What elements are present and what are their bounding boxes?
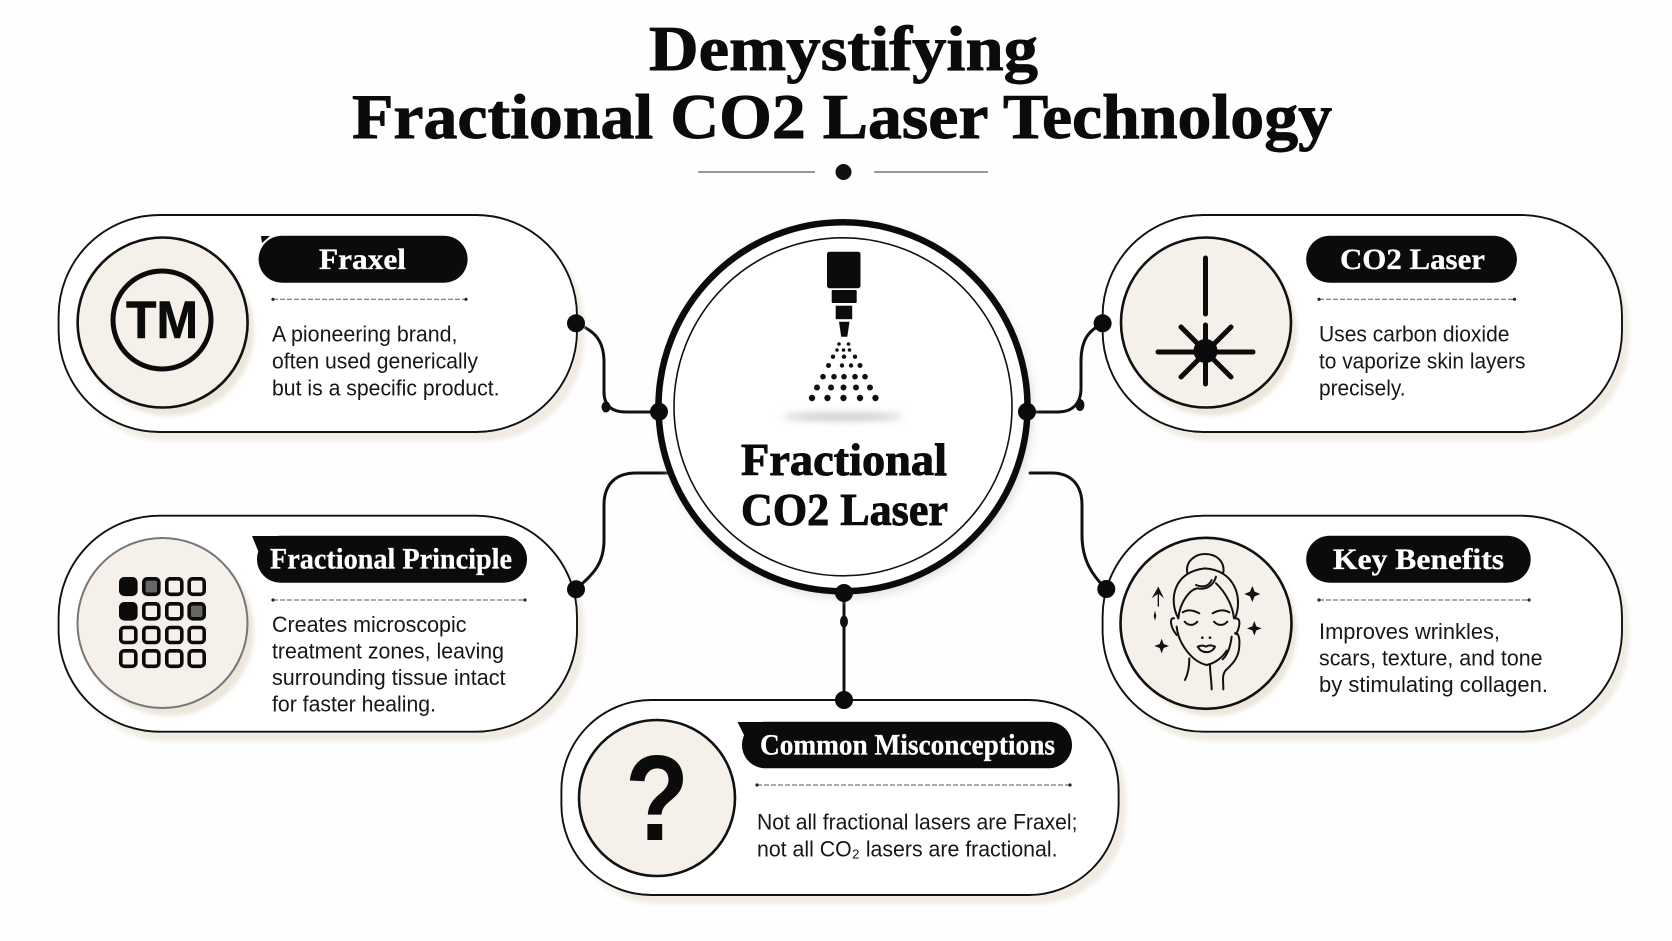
text: CO2 Laser description: [1319, 322, 1526, 401]
connector node: Key Benefits: [1097, 580, 1115, 598]
connector node: Fractional Principle: [567, 580, 585, 598]
icon: question mark: [579, 720, 735, 876]
icon: trademark: [78, 238, 254, 416]
panel: CO2 Laser: [1094, 215, 1629, 441]
heading: Common Misconceptions: Common Misconceptions: [760, 728, 1055, 762]
hub label: Fractional: [741, 435, 947, 485]
heading: Common Misconceptions: [738, 722, 1072, 768]
text: Fractional Principle description: [272, 612, 506, 716]
text: Key Benefits description: [1319, 619, 1548, 697]
icon: face with sparkles: [1120, 538, 1297, 716]
title: Fractional CO2 Laser Technology: [352, 81, 1332, 152]
central hub: [658, 222, 1032, 597]
heading: Fractional Principle: Fractional Principle: [270, 542, 512, 576]
panel: Fraxel: [59, 215, 585, 441]
text: Key Benefits description: scars, texture, and tone: [1319, 645, 1542, 670]
panel: Key Benefits: [1097, 516, 1629, 741]
text: CO2 Laser description: Uses carbon dioxide: [1319, 322, 1510, 347]
heading: Fraxel: Fraxel: [319, 243, 406, 276]
text: Fractional Principle description: surrounding tissue intact: [272, 665, 506, 690]
connector node: Fraxel: [567, 314, 585, 332]
text: Fractional Principle description: for faster healing.: [272, 691, 436, 716]
panel: Fractional Principle: [59, 516, 585, 741]
hub label: [741, 435, 948, 535]
text: Key Benefits description: Improves wrinkles,: [1319, 619, 1500, 644]
text: Common Misconceptions description: [757, 810, 1078, 862]
icon: laser nozzle: [827, 252, 860, 337]
text: CO2 Laser description: precisely.: [1319, 376, 1406, 401]
text: Fractional Principle description: Creates microscopic: [272, 612, 466, 637]
text: Fraxel description: often used generically: [272, 348, 478, 373]
icon shadow: [783, 414, 903, 420]
title: [352, 13, 1332, 152]
connectors: [576, 323, 1106, 700]
panel: Common Misconceptions: [561, 700, 1126, 904]
heading: Fraxel: [259, 236, 468, 283]
title: Demystifying: [649, 13, 1038, 84]
heading: Key Benefits: Key Benefits: [1333, 543, 1504, 576]
icon: laser burst: [1121, 238, 1297, 416]
hub outer ring: [658, 222, 1028, 591]
text: Key Benefits description: by stimulating collagen.: [1319, 672, 1548, 697]
icon: question mark: ?: [625, 730, 689, 866]
text: CO2 Laser description: to vaporize skin layers: [1319, 348, 1526, 373]
hub shadow: [660, 225, 1032, 597]
heading: Fractional Principle: [252, 536, 527, 583]
title divider: [698, 164, 988, 180]
hub label: CO2 Laser: [741, 485, 948, 535]
heading: CO2 Laser: [1306, 236, 1517, 283]
text: Fractional Principle description: treatment zones, leaving: [272, 639, 504, 664]
text: Fraxel description: [272, 322, 500, 401]
connector nodes: hub: [650, 403, 1036, 709]
text: Common Misconceptions description: Not all fractional lasers are Fraxel;: [757, 810, 1078, 834]
text: Fraxel description: but is a specific product.: [272, 376, 500, 401]
icon: trademark: TM: [126, 291, 198, 350]
text: Common Misconceptions description: not all CO₂ lasers are fractional.: [757, 837, 1058, 862]
icon: spray dots: [809, 342, 879, 401]
icon: treatment grid: [78, 538, 254, 716]
hub inner ring: [674, 238, 1012, 576]
text: Fraxel description: A pioneering brand,: [272, 322, 458, 347]
connector node: CO2 Laser: [1094, 314, 1112, 332]
heading: Key Benefits: [1306, 536, 1531, 583]
heading: CO2 Laser: CO2 Laser: [1340, 243, 1485, 276]
